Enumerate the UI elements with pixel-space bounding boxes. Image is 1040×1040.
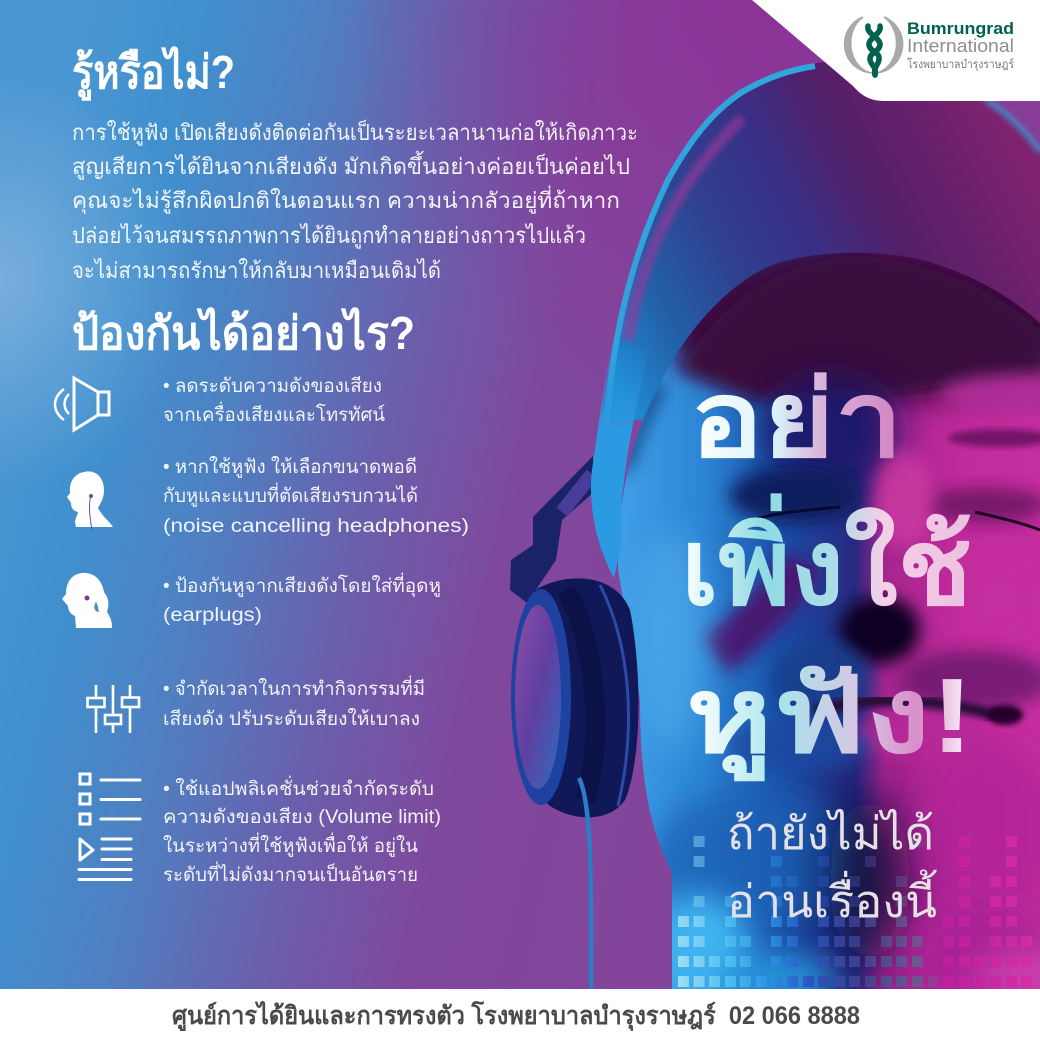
tip 3 bbox=[163, 572, 441, 626]
headline: don't use headphones yet: อย่า bbox=[690, 361, 903, 479]
fold beside nose bbox=[715, 560, 800, 655]
tip 5 bbox=[163, 775, 441, 886]
logo subtitle: International bbox=[907, 36, 1014, 56]
tip 5: ความดังของเสียง (Volume limit) bbox=[163, 806, 441, 828]
tip 2 bbox=[163, 456, 469, 537]
footer band bbox=[0, 989, 1040, 1040]
headphone ear cup bbox=[511, 578, 638, 817]
logo thai name: โรงพยาบาลบำรุงราษฎร์ bbox=[907, 57, 1014, 71]
cap side strip bbox=[591, 345, 650, 578]
tip 1: จากเครื่องเสียงและโทรทัศน์ bbox=[163, 401, 385, 426]
subheadline: until you read this: ถ้ายังไม่ได้ bbox=[727, 808, 934, 859]
right jaw magenta bbox=[905, 900, 1040, 1000]
right cheek bbox=[955, 555, 1040, 645]
tip 4: เสียงดัง ปรับระดับเสียงให้เบาลง bbox=[163, 708, 420, 730]
subheadline: until you read this: อ่านเรื่องนี้ bbox=[727, 869, 937, 927]
icon: speaker bbox=[55, 378, 109, 430]
tip 2: กับหูและแบบที่ตัดเสียงรบกวนได้ bbox=[163, 482, 418, 507]
face bbox=[618, 253, 1040, 990]
tip 2: • หากใช้หูฟัง ให้เลือกขนาดพอดี bbox=[163, 456, 417, 478]
paragraph: hearing loss explanation bbox=[72, 118, 638, 283]
left eye shadow bbox=[730, 467, 860, 523]
subheadline: until you read this bbox=[727, 808, 937, 927]
icon: head with earphones bbox=[67, 471, 113, 530]
logo bbox=[844, 17, 1014, 75]
icon: head with earplug bbox=[62, 573, 112, 628]
forehead shadow beneath brim bbox=[650, 240, 1040, 400]
pixel equalizer overlay bbox=[678, 836, 1032, 987]
headline: don't use headphones yet: เพิ่งใช้ bbox=[681, 493, 972, 627]
tip 5: ในระหว่างที่ใช้หูฟังเพื่อให้ อยู่ใน bbox=[163, 832, 418, 857]
footer contact text: ศูนย์การได้ยินและการทรงตัว โรงพยาบาลบำรุงราษฎร์ 02 066 8888 bbox=[172, 1000, 860, 1032]
forehead shadow middle bbox=[760, 375, 900, 485]
lips bbox=[815, 701, 1005, 718]
heading: how to prevent: ป้องกันได้อย่างไร? bbox=[72, 307, 415, 359]
headphone band bbox=[510, 456, 594, 603]
cap edge highlight bbox=[606, 66, 815, 440]
nose shadow bbox=[840, 596, 920, 664]
neck light bbox=[652, 895, 748, 1005]
photo: man wearing cap and headphones bbox=[510, 50, 1040, 1005]
paragraph: hearing loss explanation: ปล่อยไว้จนสมรรถภาพการได้ยินถูกทำลายอย่างถาวรไปแล้ว bbox=[72, 223, 586, 249]
right eye bbox=[923, 487, 1040, 523]
tip 5: ระดับที่ไม่ดังมากจนเป็นอันตราย bbox=[163, 861, 418, 886]
paragraph: hearing loss explanation: สูญเสียการได้ยินจากเสียงดัง มักเกิดขึ้นอย่างค่อยเป็นค่อยไป bbox=[72, 151, 630, 180]
logo name: Bumrungrad bbox=[907, 19, 1014, 38]
tip 3: • ป้องกันหูจากเสียงดังโดยใส่ที่อุดหู bbox=[163, 572, 441, 598]
tip 1 bbox=[163, 375, 385, 426]
paragraph: hearing loss explanation: การใช้หูฟัง เปิดเสียงดังติดต่อกันเป็นระยะเวลานานก่อให้เกิดภาวะ bbox=[72, 118, 638, 146]
headline: don't use headphones yet bbox=[681, 361, 974, 782]
mustache and beard bbox=[770, 640, 870, 720]
tip 4 bbox=[163, 675, 425, 730]
nose highlight bbox=[877, 452, 933, 548]
temple shadow under brim bbox=[624, 385, 660, 470]
logo emblem bbox=[844, 17, 903, 75]
white logo corner bbox=[752, 0, 1040, 101]
tip 3: (earplugs) bbox=[163, 605, 262, 626]
tip 2: (noise cancelling headphones) bbox=[163, 516, 469, 537]
paragraph: hearing loss explanation: คุณจะไม่รู้สึกผิดปกติในตอนแรก ความน่ากลัวอยู่ที่ถ้าหาก bbox=[72, 185, 620, 214]
headline: don't use headphones yet: หูฟัง! bbox=[686, 657, 974, 782]
heading: did you know: รู้หรือไม่? bbox=[72, 46, 235, 101]
paragraph: hearing loss explanation: จะไม่สามารถรักษาให้กลับมาเหมือนเดิมได้ bbox=[72, 258, 441, 283]
cap crown bbox=[603, 50, 1040, 420]
icon: sliders bbox=[88, 685, 139, 733]
eyebrow right bbox=[948, 429, 1040, 447]
tip 5: • ใช้แอปพลิเคชั่นช่วยจำกัดระดับ bbox=[163, 775, 434, 800]
lower lip bbox=[850, 715, 990, 755]
icon: checklist and playlist bbox=[79, 774, 140, 880]
tip 1: • ลดระดับความดังของเสียง bbox=[163, 375, 382, 397]
cheek glow bbox=[636, 530, 708, 750]
chin beard bbox=[650, 790, 860, 930]
headphone cable bbox=[579, 778, 591, 990]
tip 4: • จำกัดเวลาในการทำกิจกรรมที่มี bbox=[163, 675, 425, 700]
